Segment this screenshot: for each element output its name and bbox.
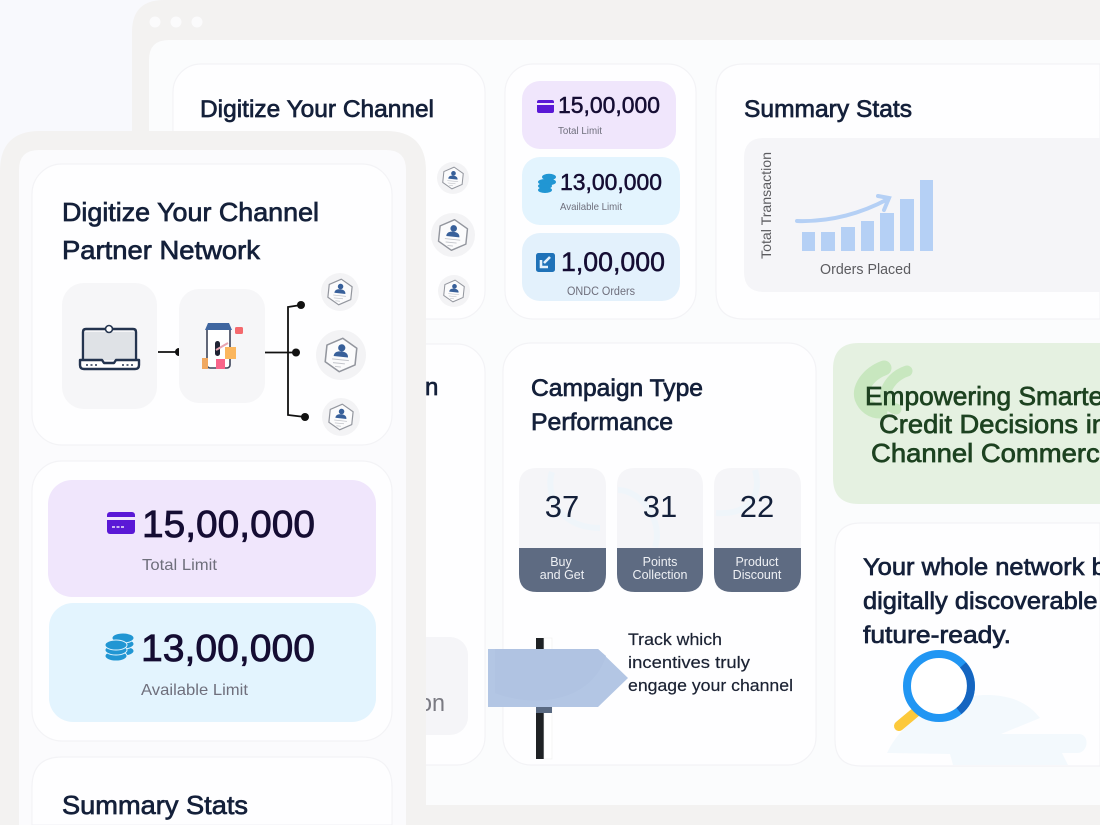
caption: engage your channel	[628, 676, 793, 695]
body text: future-ready.	[863, 622, 1011, 649]
card background	[32, 461, 392, 741]
card background	[173, 344, 485, 765]
chart panel background	[744, 138, 1100, 292]
icon: magnifying glass	[899, 654, 971, 726]
panel: summary stats front	[32, 757, 392, 825]
panel: limits stats front	[32, 461, 392, 741]
stat: total limit	[48, 480, 376, 597]
stat: available limit: 13,00,000	[560, 169, 662, 195]
panel: network discoverable	[835, 523, 1100, 766]
tile: points collection: Points	[643, 555, 677, 569]
heading: Digitize Your Channel	[200, 96, 434, 123]
caption	[628, 630, 793, 695]
card background	[716, 64, 1100, 319]
panel: limits stats back	[505, 64, 696, 319]
icon: partner middle	[316, 330, 366, 380]
stat: available limit: 13,00,000	[141, 628, 315, 670]
panel: hidden left card	[173, 344, 485, 765]
card background	[503, 343, 816, 765]
stat: total limit	[522, 81, 676, 149]
stat: ONDC orders: 1,00,000	[561, 247, 665, 277]
tile: product discount: Discount	[733, 568, 782, 582]
card background	[173, 64, 485, 319]
tile: buy and get: Buy	[550, 555, 573, 569]
stat: total limit: 15,00,000	[142, 504, 315, 546]
connector: laptop to shop	[158, 348, 183, 356]
stat: available limit: Available Limit	[141, 682, 249, 699]
tile: product discount: Product	[735, 555, 779, 569]
panel: summary stats back	[716, 64, 1100, 319]
quote text: Channel Commerce	[871, 438, 1100, 468]
tile: points collection: 31	[643, 489, 677, 524]
card background	[32, 757, 392, 825]
tile: points collection	[617, 468, 703, 592]
stat: total limit: Total Limit	[142, 557, 218, 574]
y axis label: Total Transaction	[758, 152, 774, 259]
tile: product discount: 22	[740, 489, 774, 524]
panel: front phone	[0, 131, 426, 825]
partial inner box	[300, 637, 468, 735]
stat: total limit: Total Limit	[558, 126, 602, 137]
icon: avatar bottom	[438, 275, 470, 307]
browser window dots	[150, 16, 202, 28]
icon: avatar middle	[431, 213, 475, 257]
tile: product discount	[714, 468, 801, 592]
panel: digitize partner network	[32, 164, 392, 445]
stat: total limit: 15,00,000	[558, 92, 660, 118]
tile: buy and get	[519, 468, 606, 592]
tile: laptop	[62, 283, 157, 409]
partial heading: n	[425, 374, 438, 401]
bar chart	[802, 180, 933, 251]
stat: available limit: Available Limit	[560, 201, 622, 213]
arrow: growth trend	[797, 196, 889, 221]
heading: Summary Stats	[744, 96, 912, 123]
heading	[62, 197, 319, 265]
heading: Digitize Your Channel	[62, 197, 319, 227]
panel: campaign type performance	[488, 343, 816, 765]
tile: mobile shop	[179, 289, 265, 403]
quote text	[865, 381, 1100, 468]
heading: Summary Stats	[62, 790, 248, 820]
heading	[531, 375, 703, 436]
icon: quote mark	[861, 368, 907, 411]
stat: ONDC orders: ONDC Orders	[567, 286, 635, 298]
tile: buy and get: 37	[545, 489, 579, 524]
card background	[32, 164, 392, 445]
illustration: pale cloud	[887, 695, 1087, 765]
tile: buy and get: and Get	[540, 568, 585, 582]
phone screen	[19, 150, 406, 825]
tile: points collection: Collection	[633, 568, 687, 582]
phone frame	[0, 131, 426, 825]
panel: quote	[833, 343, 1100, 504]
caption: incentives truly	[628, 653, 751, 672]
icon: signpost	[488, 638, 628, 759]
stat: available limit	[522, 157, 680, 225]
partial label: on	[419, 690, 445, 717]
icon: partner bottom	[322, 398, 360, 436]
card background	[505, 64, 696, 319]
body text	[863, 554, 1100, 649]
quote background	[833, 343, 1100, 504]
heading: Performance	[531, 409, 673, 436]
panel: digitize channel back card	[173, 64, 485, 319]
heading: Campaign Type	[531, 375, 703, 402]
icon: partner top	[321, 273, 359, 311]
x axis label: Orders Placed	[820, 262, 911, 278]
caption: Track which	[628, 630, 722, 649]
heading: Partner Network	[62, 235, 261, 265]
card background	[835, 523, 1100, 766]
quote text: Credit Decisions in	[879, 409, 1100, 439]
icon: avatar top	[437, 162, 469, 194]
connector: shop to partners	[265, 301, 309, 421]
stat: ONDC orders	[522, 233, 680, 301]
stat: available limit	[49, 603, 376, 722]
